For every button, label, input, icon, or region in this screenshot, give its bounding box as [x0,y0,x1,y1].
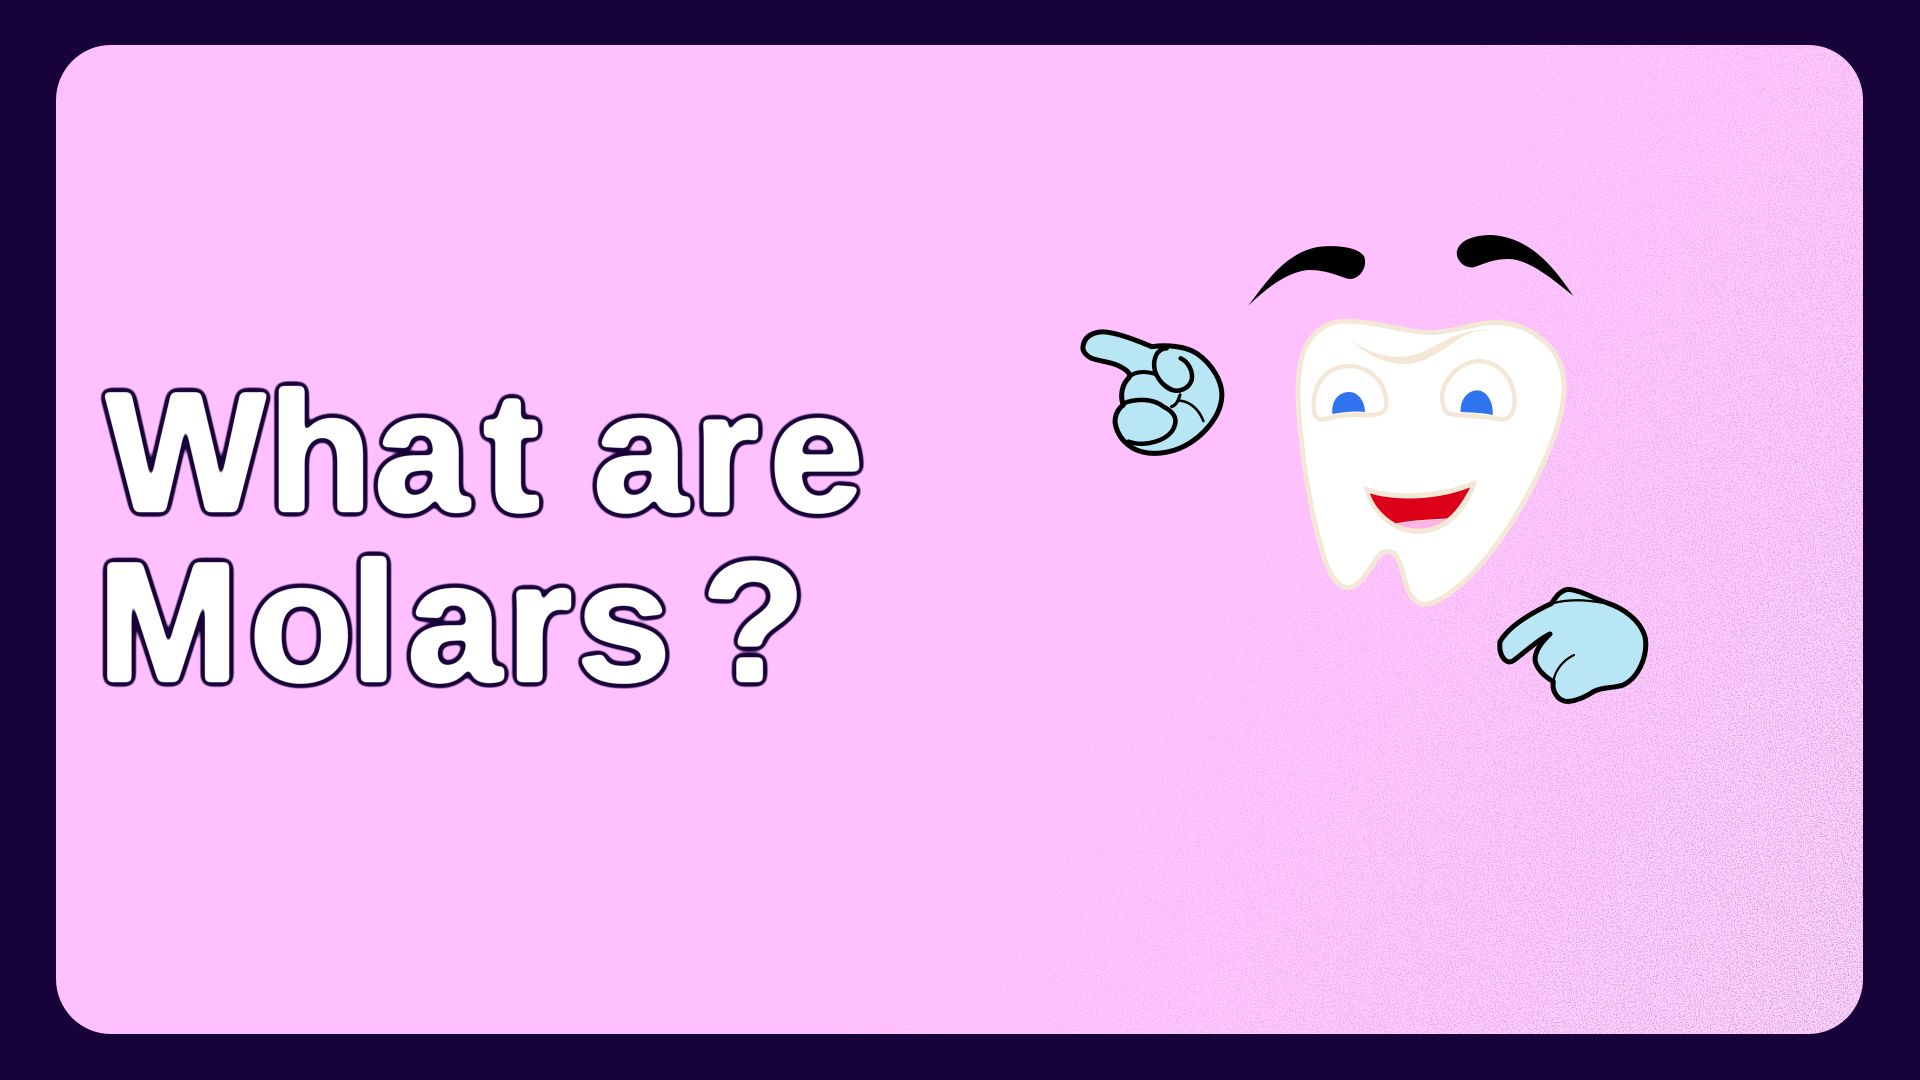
character: tooth with eyebrows [1248,235,1574,604]
title [97,357,864,718]
left eyebrow [1248,246,1365,306]
tooth body [1298,321,1564,604]
forehead crease [1351,330,1489,364]
right pupil [1461,390,1493,415]
right eye [1442,361,1515,420]
icon: right hand pointing [1500,589,1646,701]
left eye [1314,366,1386,419]
title: Molars ? [97,527,805,718]
left pupil [1332,392,1365,414]
right eyebrow [1457,235,1574,296]
icon: left hand pointing [1083,332,1222,453]
title: What are [105,357,864,548]
mouth [1363,479,1477,534]
